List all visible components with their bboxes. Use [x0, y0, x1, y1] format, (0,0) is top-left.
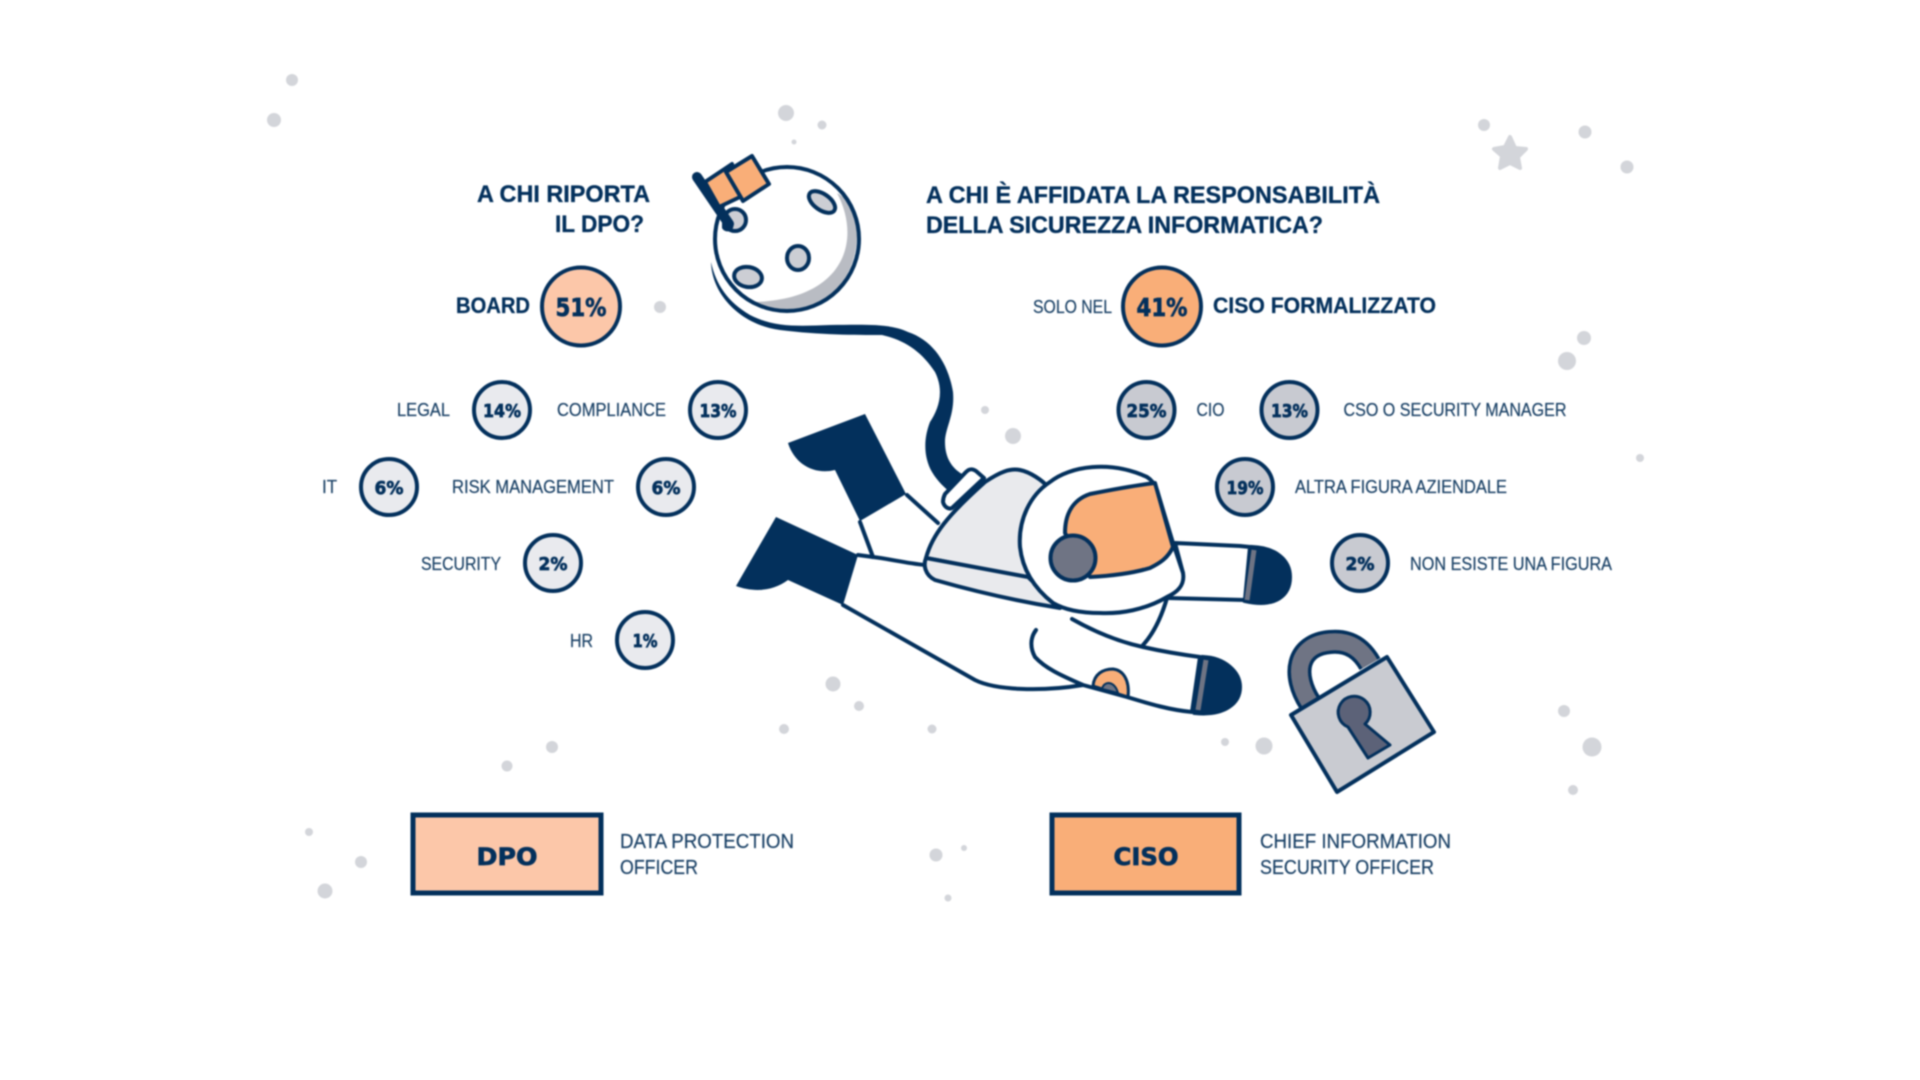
- legend: CISO: [1052, 815, 1451, 893]
- stat: altra figura 19%: 19%: [1226, 478, 1264, 499]
- icon: oxygen tether: [711, 262, 962, 492]
- legend: DPO: DATA PROTECTION: [620, 831, 794, 853]
- icon: helmet: [1020, 467, 1183, 613]
- legend: CISO: CHIEF INFORMATION: [1260, 831, 1451, 853]
- heading: responsabilità sicurezza informatica: A CHI È AFFIDATA LA RESPONSABILITÀ: [926, 181, 1380, 209]
- stat: security 2%: 2%: [538, 554, 568, 575]
- legend: DPO: DPO: [476, 843, 538, 871]
- stat: IT 6%: [322, 459, 417, 515]
- stat: risk management 6%: 6%: [652, 478, 680, 499]
- stat: altra figura 19%: ALTRA FIGURA AZIENDALE: [1295, 477, 1507, 497]
- stat: CSO 13%: [1262, 382, 1566, 438]
- icon: lower boot: [736, 517, 858, 605]
- icon: visor: [1065, 483, 1173, 577]
- stat: legal 14%: LEGAL: [397, 400, 450, 420]
- icon: upper boot: [788, 414, 906, 521]
- lower leg and torso outline: [843, 555, 1083, 689]
- stat: board 51%: 51%: [556, 293, 606, 322]
- legend: DPO: OFFICER: [620, 857, 698, 879]
- legend: DPO: [413, 815, 794, 893]
- legend: CISO: SECURITY OFFICER: [1260, 857, 1434, 879]
- icon: arm patch: [1093, 669, 1128, 697]
- stat: CIO 25%: 25%: [1126, 401, 1166, 422]
- stat: compliance 13%: COMPLIANCE: [557, 400, 666, 420]
- stat: CSO 13%: CSO O SECURITY MANAGER: [1344, 400, 1566, 420]
- stat: CISO 41%: 41%: [1136, 293, 1188, 322]
- stat: security 2%: [421, 535, 581, 591]
- legend: CISO: CISO: [1114, 843, 1178, 871]
- stat: security 2%: SECURITY: [421, 554, 501, 574]
- stat: CIO 25%: CIO: [1196, 400, 1224, 420]
- background stars and dots: [267, 74, 1644, 902]
- upper leg outline: [860, 495, 938, 557]
- icon: flag: [697, 156, 769, 231]
- stat: HR 1%: 1%: [632, 631, 658, 652]
- astronaut: [736, 414, 1290, 713]
- icon: padlock: [1291, 642, 1434, 792]
- stat: legal 14%: [397, 382, 530, 438]
- icon: lower arm: [1031, 619, 1240, 713]
- stat: CIO 25%: [1118, 382, 1224, 438]
- heading: a chi riporta il DPO: A CHI RIPORTA: [477, 181, 650, 208]
- stat: non esiste 2%: 2%: [1346, 554, 1374, 575]
- stat: non esiste 2%: [1332, 535, 1612, 591]
- stat: HR 1%: [570, 612, 673, 668]
- heading: responsabilità sicurezza informatica: DELLA SICUREZZA INFORMATICA?: [926, 212, 1323, 239]
- stat: HR 1%: HR: [570, 631, 593, 651]
- heading: responsabilità sicurezza informatica: [926, 181, 1380, 239]
- icon: upper arm: [1167, 543, 1290, 603]
- heading: a chi riporta il DPO: [477, 181, 650, 238]
- stat: board 51%: [456, 268, 620, 346]
- icon: helmet knob: [1050, 536, 1096, 580]
- panel: DPO reporting stats: [322, 268, 746, 668]
- stat: IT 6%: IT: [322, 477, 337, 497]
- stat: risk management 6%: [452, 459, 694, 515]
- backpack strap: [943, 469, 984, 509]
- icon: moon with flag: [697, 156, 859, 311]
- stat: legal 14%: 14%: [483, 401, 521, 422]
- stat: compliance 13%: 13%: [700, 401, 736, 422]
- stat: CSO 13%: 13%: [1271, 401, 1308, 422]
- stat: CISO 41%: SOLO NEL: [1033, 297, 1112, 317]
- stat: non esiste 2%: NON ESISTE UNA FIGURA: [1410, 554, 1612, 574]
- stat: altra figura 19%: [1217, 459, 1507, 515]
- stat: compliance 13%: [557, 382, 746, 438]
- panel: security responsibility stats: [1033, 268, 1612, 591]
- heading: a chi riporta il DPO: IL DPO?: [555, 211, 644, 238]
- stat: board 51%: BOARD: [456, 293, 530, 318]
- stat: CISO 41%: [1033, 268, 1436, 346]
- stat: risk management 6%: RISK MANAGEMENT: [452, 477, 614, 497]
- suit pack: [926, 470, 1060, 577]
- stat: IT 6%: 6%: [374, 478, 404, 499]
- strap lines: [1143, 598, 1167, 645]
- stat: CISO 41%: CISO FORMALIZZATO: [1213, 293, 1436, 318]
